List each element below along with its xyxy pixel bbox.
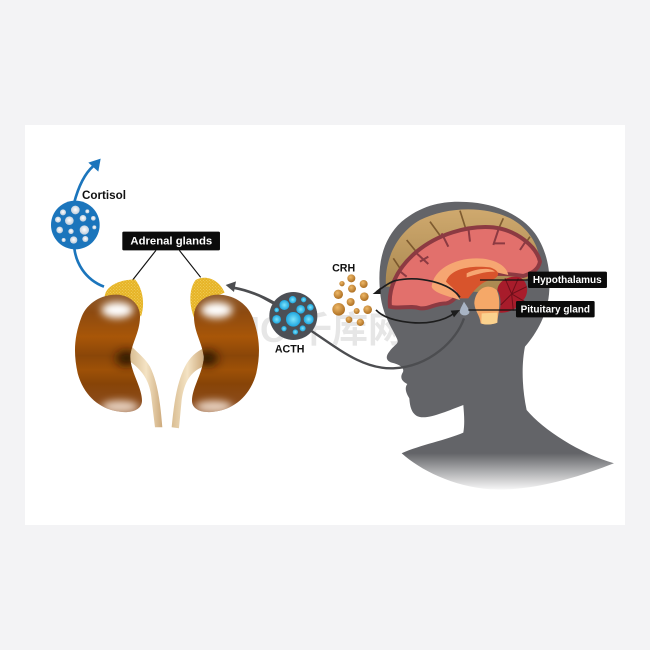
ACTH label: ACTH xyxy=(275,344,304,356)
cortisol label: Cortisol xyxy=(82,189,126,202)
pituitary gland label: Pituitary gland xyxy=(521,304,590,315)
right adrenal gland xyxy=(190,278,225,317)
arrow: pituitary to ACTH xyxy=(310,318,464,368)
hypothalamus label xyxy=(528,272,607,288)
head silhouette xyxy=(379,202,614,490)
brainstem xyxy=(474,287,499,324)
ACTH cell xyxy=(269,292,317,340)
white panel xyxy=(25,125,625,525)
CRH molecules xyxy=(332,274,372,326)
CRH label: CRH xyxy=(332,263,355,275)
adrenal glands label xyxy=(122,232,220,250)
hypothalamus label: Hypothalamus xyxy=(533,275,602,286)
arrow: ACTH line upper-left xyxy=(260,296,273,303)
label lines xyxy=(133,250,201,280)
pituitary gland xyxy=(460,302,469,315)
corpus callosum xyxy=(432,258,508,300)
adrenal glands label: Adrenal glands xyxy=(130,236,212,248)
cortisol arrow xyxy=(74,159,104,287)
cerebellum xyxy=(497,277,527,313)
arrow: ACTH to adrenal xyxy=(226,281,275,303)
cerebrum xyxy=(390,227,540,308)
arrow: brain to CRH xyxy=(373,279,460,297)
right ureter xyxy=(172,348,203,428)
pituitary gland label xyxy=(516,301,595,317)
sulci xyxy=(398,227,527,277)
watermark: IC 千库网 xyxy=(250,309,404,350)
label lines xyxy=(468,280,530,310)
arrow: CRH to pituitary xyxy=(376,310,460,323)
cortex folds xyxy=(393,211,530,273)
cortex xyxy=(386,209,541,292)
head diagram xyxy=(260,202,614,490)
left kidney xyxy=(75,295,142,413)
thalamus xyxy=(446,267,498,298)
adrenal and kidney diagram xyxy=(51,159,275,428)
left ureter xyxy=(130,347,162,427)
right kidney xyxy=(192,295,259,413)
left adrenal gland xyxy=(105,279,143,317)
cortisol cell xyxy=(51,201,100,249)
